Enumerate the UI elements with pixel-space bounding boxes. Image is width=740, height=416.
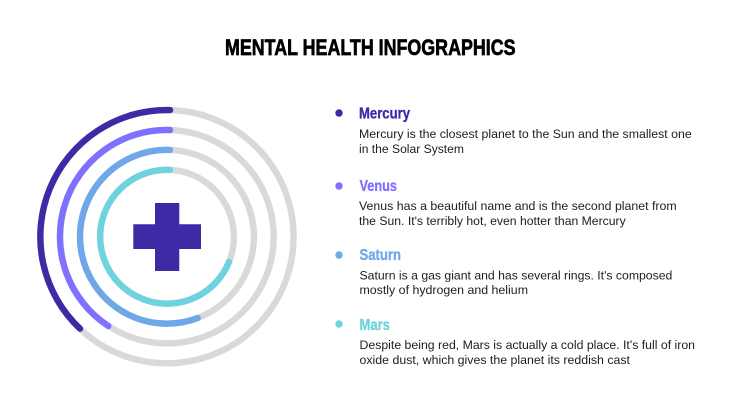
text: Mars description: oxide dust, which gives the planet its reddish cast — [360, 353, 631, 367]
ring arc: Mercury — [40, 110, 170, 329]
text: Mercury description: in the Solar System — [359, 142, 464, 156]
chart: concentric progress rings — [40, 110, 294, 363]
text: Saturn description: mostly of hydrogen and helium — [360, 283, 528, 297]
text: Saturn description: Saturn is a gas giant and has several rings. It's composed — [360, 268, 672, 282]
ring arc: Mars — [100, 170, 229, 304]
text: Mercury description: Mercury is the closest planet to the Sun and the smallest one — [359, 127, 692, 141]
text: Mars description: Despite being red, Mars is actually a cold place. It's full of iron — [360, 338, 695, 352]
bullet: Mars — [335, 320, 343, 328]
heading: Venus: Venus — [360, 178, 397, 195]
bullet: Venus — [335, 182, 343, 190]
ring tracks — [40, 110, 294, 363]
list item: Mercury — [335, 106, 692, 156]
list item: Saturn — [335, 247, 672, 297]
bullet: Mercury — [335, 109, 343, 117]
heading: Saturn: Saturn — [360, 247, 401, 264]
ring arc: Saturn — [80, 150, 198, 324]
list item: Mars — [335, 317, 695, 367]
list item: Venus — [335, 178, 677, 228]
text: Mercury description — [359, 127, 692, 156]
text: Saturn description — [360, 268, 672, 297]
text: Venus description: Venus has a beautiful name and is the second planet from — [359, 199, 677, 213]
heading: Mars: Mars — [360, 317, 390, 334]
title: MENTAL HEALTH INFOGRAPHICS — [225, 35, 516, 60]
heading: Mercury: Mercury — [359, 106, 410, 122]
text: Venus description: the Sun. It's terribly hot, even hotter than Mercury — [359, 214, 626, 228]
bullet: Saturn — [335, 251, 343, 259]
ring arc: Venus — [60, 130, 170, 326]
text: Mars description — [360, 338, 695, 367]
icon: medical cross — [133, 203, 201, 271]
text: Venus description — [359, 199, 677, 228]
